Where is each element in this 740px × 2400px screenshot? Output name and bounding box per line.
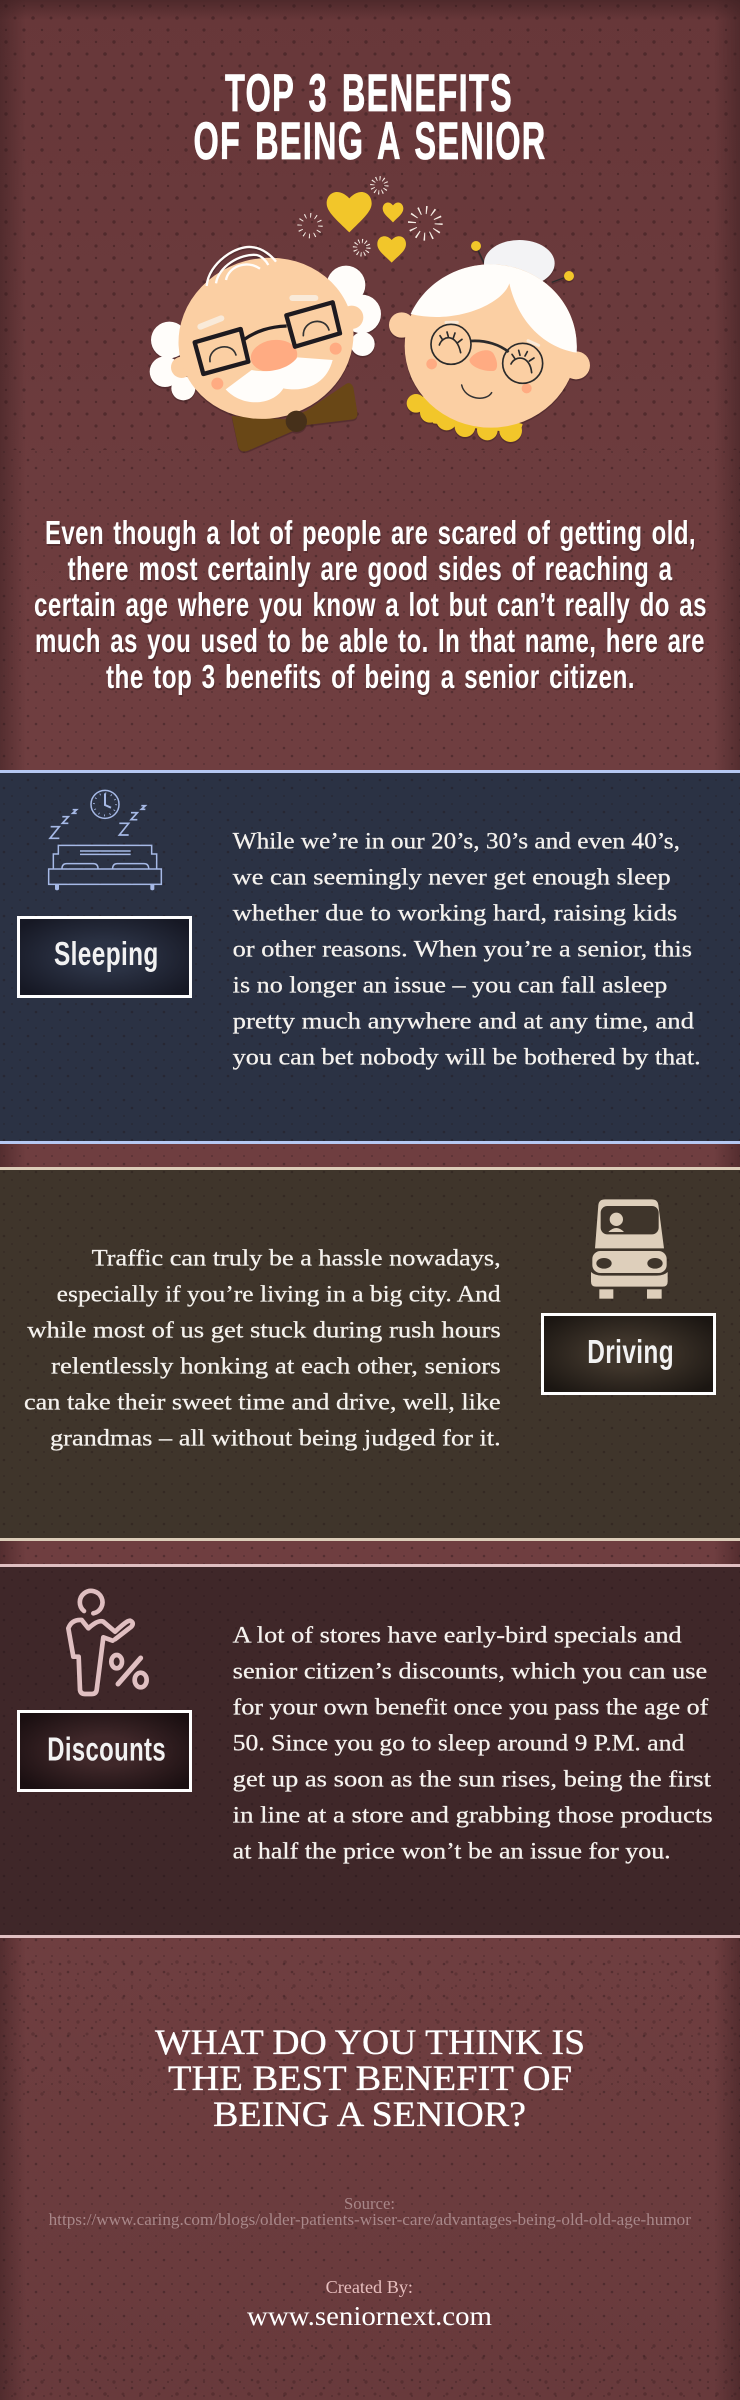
text: driving: Traffic can truly be a hassle nowadays, (92, 1246, 501, 1271)
text: driving: relentlessly honking at each other, seniors (51, 1354, 501, 1379)
title: TOP 3 BENEFITS (225, 64, 513, 123)
text: discounts: at half the price won’t be an issue for you. (233, 1838, 671, 1863)
text: discounts: 50. Since you go to sleep around 9 P.M. and (233, 1730, 685, 1755)
icon: car (591, 1199, 668, 1299)
credit: Created By: (326, 2277, 413, 2297)
label: driving: Driving (587, 1333, 674, 1370)
icon: hearts (327, 192, 406, 263)
label: driving (542, 1314, 714, 1394)
illustration: senior couple with hearts (150, 178, 590, 451)
text: discounts: A lot of stores have early-bird specials and (233, 1622, 682, 1647)
head (160, 238, 372, 438)
label: sleeping (18, 918, 190, 996)
title (194, 64, 546, 171)
label: discounts (18, 1712, 190, 1790)
nose (469, 350, 497, 371)
icon: bed with clock (49, 790, 161, 890)
closing question heading: WHAT DO YOU THINK IS (155, 2022, 585, 2062)
text: discounts (233, 1622, 713, 1863)
credit (247, 2277, 492, 2331)
intro paragraph (34, 514, 707, 695)
text: sleeping: we can seemingly never get enough sleep (233, 865, 671, 890)
label: discounts: Discounts (47, 1731, 166, 1768)
hair puffs (150, 266, 381, 400)
glasses (431, 324, 543, 383)
panel: sleeping (0, 770, 740, 1144)
hair strands (207, 247, 276, 286)
source citation (49, 2194, 691, 2229)
icon: person with percent sign (68, 1591, 147, 1694)
text: sleeping: whether due to working hard, raising kids (233, 901, 677, 926)
closing question heading (155, 2022, 585, 2134)
collar (407, 394, 523, 442)
panel: discounts (0, 1564, 740, 1938)
illustration: grandfather (150, 238, 381, 451)
smile (462, 385, 492, 398)
highlights (446, 322, 539, 345)
nose (249, 337, 299, 375)
panel: driving (0, 1167, 740, 1541)
text: discounts: for your own benefit once you pass the age of (233, 1694, 709, 1719)
closed eyes (210, 321, 329, 362)
text: discounts: in line at a store and grabbing those products (233, 1802, 713, 1827)
glasses (195, 302, 340, 374)
text: driving: grandmas – all without being judged for it. (50, 1426, 501, 1451)
cheeks (426, 359, 532, 393)
bun (484, 240, 555, 287)
label: sleeping: Sleeping (54, 935, 159, 972)
source citation: https://www.caring.com/blogs/older-patients-wiser-care/advantages-being-old-old-age-humor (49, 2210, 691, 2229)
closing question heading: BEING A SENIOR? (213, 2094, 526, 2134)
cheeks (211, 343, 342, 390)
source citation: Source: (344, 2194, 395, 2213)
text: sleeping (233, 828, 701, 1070)
text: sleeping: pretty much anywhere and at any time, and (233, 1009, 695, 1034)
hair (411, 264, 577, 353)
text: driving: while most of us get stuck during rush hours (27, 1318, 501, 1343)
text: sleeping: you can bet nobody will be bothered by that. (233, 1045, 701, 1070)
icon: sparkles (300, 178, 439, 254)
text: driving: especially if you’re living in a big city. And (57, 1282, 501, 1307)
text: sleeping: is no longer an issue – you can fall asleep (233, 973, 667, 998)
text: discounts: senior citizen’s discounts, which you can use (233, 1658, 707, 1683)
bow tie (232, 383, 357, 451)
illustration: grandmother (389, 240, 590, 442)
text: sleeping: While we’re in our 20’s, 30’s and even 40’s, (233, 828, 680, 853)
text: driving (24, 1246, 501, 1451)
credit: www.seniornext.com (247, 2301, 492, 2331)
text: driving: can take their sweet time and drive, well, like (24, 1390, 501, 1415)
head (389, 264, 590, 428)
hair pins (476, 246, 569, 282)
bow tie knot (286, 411, 307, 432)
closing question heading: THE BEST BENEFIT OF (168, 2058, 572, 2098)
text: discounts: get up as soon as the sun rises, being the first (233, 1766, 712, 1791)
moustache (226, 357, 333, 402)
text: sleeping: or other reasons. When you’re a senior, this (233, 937, 692, 962)
eyebrow highlights (200, 298, 315, 327)
eyes and lashes (439, 332, 534, 373)
